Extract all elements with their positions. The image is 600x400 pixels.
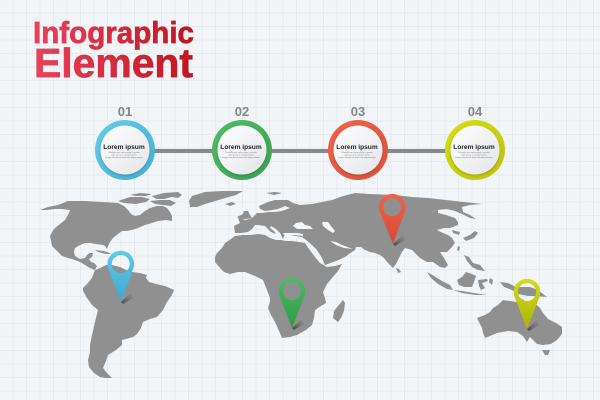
australia (477, 298, 562, 345)
step 03: Lorem ipsum (336, 144, 378, 151)
japan (463, 231, 478, 241)
step 01: Integer vitae dui sit amet nulla aliquet tempor (105, 156, 143, 159)
mediterranean islands gap (283, 233, 303, 236)
taiwan (457, 246, 460, 251)
madagascar (333, 300, 345, 322)
pin: red, asia (379, 194, 406, 246)
world map (40, 191, 562, 378)
step 04: eget mauris at, tincidunt lorem (461, 154, 487, 156)
iceland (225, 202, 236, 206)
step 04: Phasellus nec mattis neque, convallis (458, 151, 490, 154)
black sea (293, 222, 313, 229)
step 02: 02 (235, 104, 249, 119)
pin: blue, south america (107, 251, 134, 304)
step 03: eget mauris at, tincidunt lorem (344, 154, 370, 156)
step 03: Phasellus nec mattis neque, convallis (341, 151, 373, 154)
step 02: eget mauris at, tincidunt lorem (228, 154, 254, 156)
java (453, 290, 487, 295)
uk (237, 211, 252, 219)
svalbard (266, 192, 282, 195)
north america (40, 201, 172, 270)
greenland (189, 191, 243, 207)
step 01: eget mauris at, tincidunt lorem (111, 154, 137, 156)
sumatra (427, 272, 453, 290)
step 02: Lorem ipsum (220, 144, 262, 151)
south america (83, 265, 174, 378)
step 01 (95, 104, 155, 180)
caspian sea (322, 222, 335, 233)
step 02: Phasellus nec mattis neque, convallis (225, 151, 257, 154)
step 04: Integer vitae dui sit amet nulla aliquet tempor (455, 156, 493, 159)
africa (215, 234, 342, 338)
moluccas (489, 278, 493, 285)
step 01: Phasellus nec mattis neque, convallis (108, 151, 140, 154)
pin: yellow, australia (514, 279, 540, 331)
step 04: Lorem ipsum (453, 144, 495, 151)
eurasia (234, 193, 482, 268)
title: Infographic (33, 15, 194, 50)
step 02 (212, 104, 272, 180)
sulawesi (478, 279, 488, 290)
step 01: Lorem ipsum (103, 144, 145, 151)
tasmania (542, 350, 550, 355)
step 03: Integer vitae dui sit amet nulla aliquet tempor (338, 156, 376, 159)
seas (283, 222, 353, 249)
cuba (95, 250, 112, 254)
pin: green, africa (279, 278, 305, 330)
step 03 (328, 104, 388, 180)
step 03: 03 (351, 104, 365, 119)
persian gulf (330, 241, 353, 249)
step 04 (445, 104, 505, 180)
new guinea (500, 282, 547, 297)
philippines (464, 255, 485, 271)
title: Element (34, 40, 193, 86)
title (33, 15, 194, 86)
arctic islands (118, 197, 150, 204)
step 04: 04 (468, 104, 483, 119)
connector line (150, 149, 450, 153)
sri lanka (396, 268, 401, 273)
step 02: Integer vitae dui sit amet nulla aliquet tempor (222, 156, 260, 159)
borneo (457, 272, 476, 287)
step 01: 01 (118, 104, 132, 119)
